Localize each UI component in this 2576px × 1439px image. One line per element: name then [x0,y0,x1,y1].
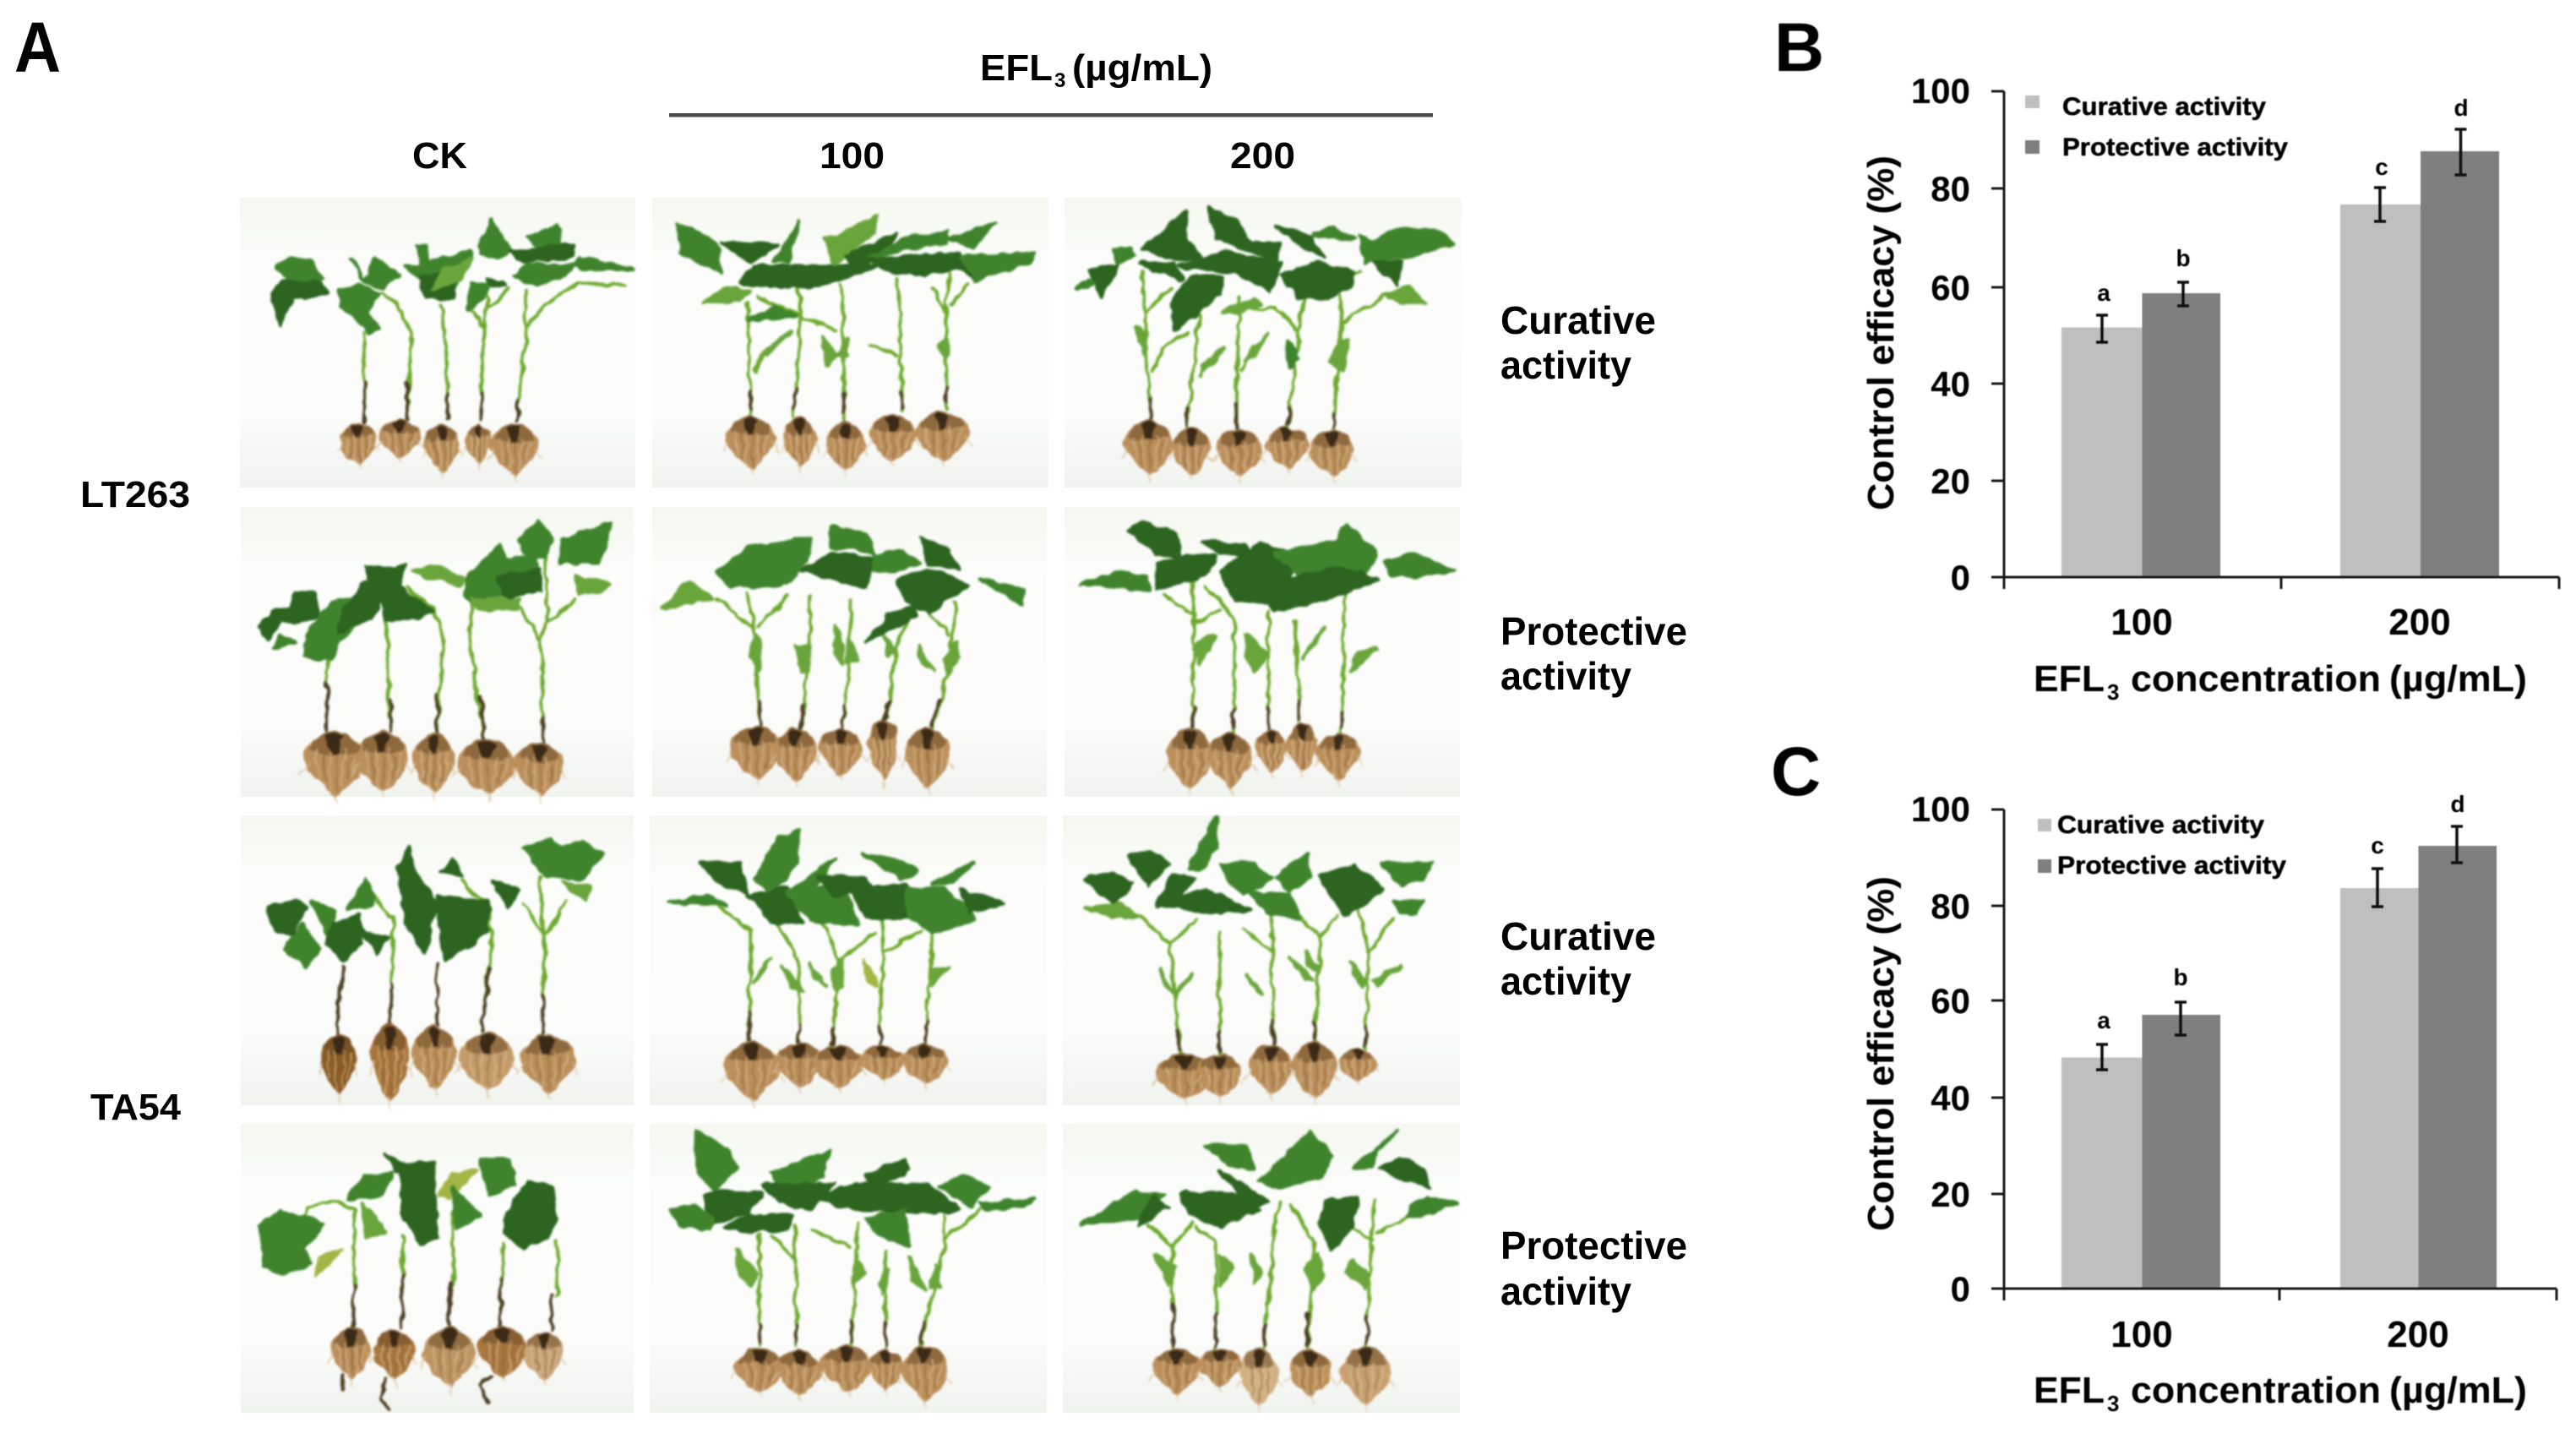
photo: TA54 protective 100 [650,1124,1047,1413]
row label LT263: LT263 [80,474,190,515]
row label curative activity 2: activity [1500,959,1631,1003]
significance letters: a [2097,280,2110,306]
significance letters [2097,95,2469,306]
photo: LT263 curative 200 [1065,198,1462,488]
y tick labels [1911,789,1970,1309]
row label curative activity 1: activity [1500,343,1631,387]
legend: Curative activity [2062,93,2266,121]
x tick labels: 200 [2388,602,2451,643]
column label 100: 100 [820,135,885,177]
heading: EFL3 dose: (µg/mL) [1072,47,1212,89]
legend: Protective activity [2062,134,2288,161]
heading: EFL3 dose: 3 [1054,69,1065,92]
legend: Protective activity [2057,852,2286,880]
x axis title [2034,1370,2527,1416]
row label curative activity 2: Curative [1500,914,1656,958]
y axis title: Control efficacy (%) [1860,155,1902,510]
x tick labels: 100 [2110,602,2173,643]
bars [2061,151,2499,577]
photo: LT263 protective 200 [1065,507,1460,797]
y tick labels: 60 [1931,981,1970,1021]
y tick labels: 80 [1931,886,1970,926]
legend [2025,93,2288,161]
x axis title: EFL [2034,658,2105,700]
significance letters: b [2176,245,2191,271]
panel letter A: A [14,8,61,87]
column label 200: 200 [1230,135,1295,177]
heading: EFL3 dose: EFL [980,47,1053,89]
bars [2061,846,2497,1289]
panel letter B: B [1774,9,1824,86]
y tick labels: 40 [1931,364,1970,404]
y axis title: Control efficacy (%) [1860,876,1902,1231]
x axis title: concentration [2131,1370,2381,1411]
x tick labels [2110,602,2451,643]
heading: EFL3 dose [980,47,1212,92]
panel C: TA54 bar chart [1771,733,2557,1416]
row label curative activity 1: Curative [1500,298,1656,342]
y tick labels: 60 [1931,268,1970,308]
legend [2038,811,2286,880]
photo: TA54 protective CK [241,1124,634,1413]
significance letters: b [2173,964,2188,990]
x axis title: 3 [2107,679,2119,705]
row label TA54: TA54 [90,1087,182,1128]
axes [1991,809,2557,1300]
y tick labels: 0 [1951,1269,1970,1309]
row label curative activity 2 [1500,914,1656,1003]
error bars [2096,826,2463,1070]
error bars [2096,129,2467,342]
photo: TA54 curative 100 [650,815,1047,1107]
x axis title: (µg/mL) [2389,658,2527,700]
y tick labels: 20 [1931,461,1970,501]
significance letters: c [2375,154,2388,180]
axes [1991,91,2559,589]
panel A: plant photographs [14,8,1687,1413]
legend: Curative activity [2057,811,2264,839]
significance letters: a [2097,1007,2110,1033]
row label protective activity 1: activity [1500,654,1631,698]
x axis title: (µg/mL) [2389,1370,2527,1411]
row label protective activity 2: activity [1500,1269,1631,1313]
photo: TA54 curative CK [241,815,634,1109]
photo: TA54 curative 200 [1063,815,1460,1106]
x tick labels: 100 [2110,1314,2173,1355]
panel letter C: C [1771,733,1821,810]
x axis title: EFL [2034,1370,2105,1411]
x axis title: concentration [2131,658,2381,700]
row label protective activity 2: Protective [1500,1224,1687,1267]
x tick labels [2110,1314,2449,1355]
y tick labels: 40 [1931,1078,1970,1118]
y tick labels: 0 [1951,558,1970,597]
y tick labels: 100 [1911,789,1970,829]
photo: LT263 protective 100 [652,507,1047,797]
photo: LT263 protective CK [241,507,634,802]
column label CK: CK [412,135,467,177]
y tick labels: 100 [1911,71,1970,111]
x axis title [2034,658,2527,705]
x tick labels: 200 [2387,1314,2449,1355]
y tick labels: 80 [1931,169,1970,209]
y tick labels: 20 [1931,1175,1970,1214]
x axis title: 3 [2107,1391,2119,1416]
row label protective activity 1: Protective [1500,609,1687,653]
significance letters: c [2371,832,2384,858]
significance letters: d [2450,791,2465,817]
row label protective activity 1 [1500,609,1687,698]
panel B: LT263 bar chart [1774,9,2559,705]
significance letters: d [2453,95,2469,121]
row label protective activity 2 [1500,1224,1687,1313]
photo: TA54 protective 200 [1063,1124,1460,1413]
row label curative activity 1 [1500,298,1656,387]
photo: LT263 curative CK [240,198,635,488]
y tick labels [1911,71,1970,597]
photo: LT263 curative 100 [652,198,1048,488]
significance letters [2097,791,2465,1033]
